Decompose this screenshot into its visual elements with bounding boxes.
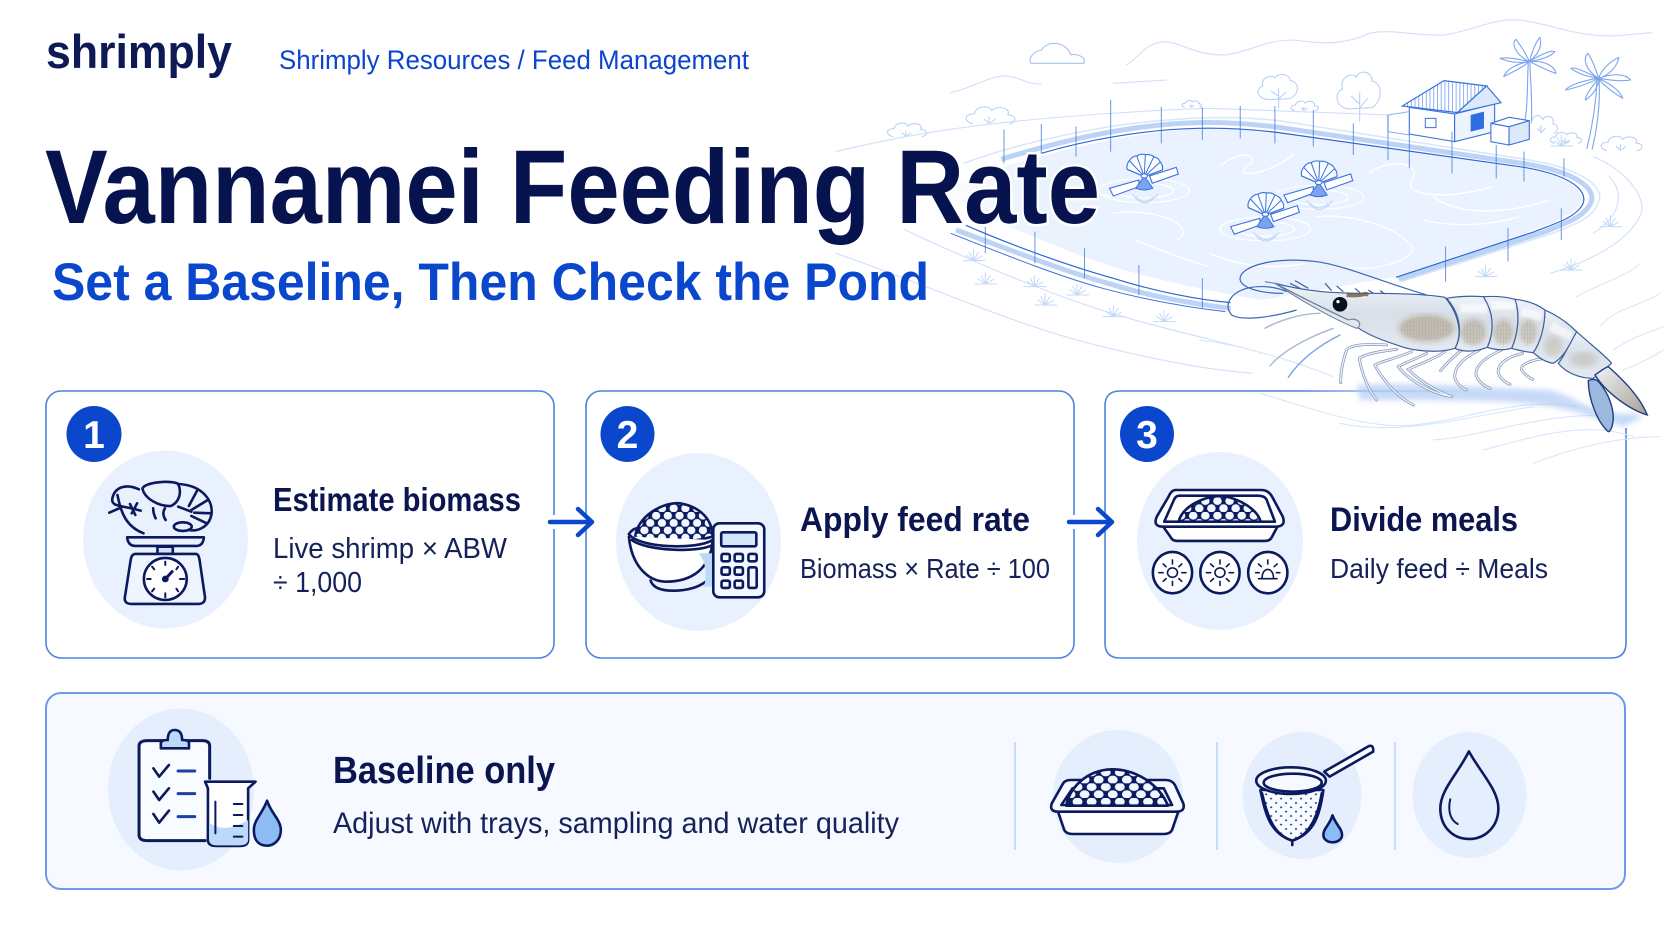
step 1 heading: Estimate biomass [273,481,521,518]
pond water [927,129,1581,300]
step 1 formula: ÷ 1,000 [273,567,362,599]
step 1 formula [273,533,508,599]
panel heading: Baseline only [333,750,555,792]
panel frame [46,693,1625,889]
step number badge: 1 [83,414,105,457]
step 2 heading: Apply feed rate [800,501,1030,539]
step 2 formula: Biomass × Rate ÷ 100 [800,553,1050,584]
panel: step 1 estimate biomass [46,391,554,658]
step number badge: 3 [1136,414,1158,457]
panel: step 2 apply feed rate [586,391,1074,658]
pond banks [951,118,1600,312]
shrimp body [1275,283,1612,378]
rostrum and eye [1265,281,1385,328]
title: Vannamei Feeding Rate [45,129,1100,246]
water lines [1200,263,1663,463]
aerators [1099,154,1364,241]
palm trees [1500,37,1631,149]
step 1 formula: Live shrimp × ABW [273,533,508,565]
shrimp illustration [1200,260,1663,463]
step number badge [66,406,122,462]
hills and clouds [836,20,1652,373]
icon: clipboard, beaker and drop [108,708,281,870]
background scene: pond illustration [836,20,1652,373]
icon: feed tray [1051,730,1184,863]
icon: feed bowl and calculator [616,453,781,631]
farm house [1388,81,1529,145]
panel: baseline only [46,693,1625,889]
subtitle: Set a Baseline, Then Check the Pond [52,253,929,312]
antennae [1240,260,1427,295]
water ripples [1060,153,1551,268]
step 3 heading: Divide meals [1330,501,1518,539]
ground shadow [1357,384,1643,427]
card frame [1105,391,1626,658]
icon: water drop [1412,732,1526,858]
step number badge [600,406,654,462]
fence posts [985,100,1564,308]
logo: shrimply [46,25,232,78]
icon: feed tray and three meal times [1137,452,1303,630]
step number badge: 2 [617,414,638,457]
feelers [1265,313,1340,377]
arrow: step 2 to step 3 [1068,509,1112,535]
icon: sampling net [1242,732,1373,859]
arrow: step 1 to step 2 [549,509,592,535]
tail fan [1588,367,1647,432]
panel: step 3 divide meals [1105,391,1626,658]
step 3 formula: Daily feed ÷ Meals [1330,553,1548,584]
grass tufts [963,135,1622,322]
breadcrumb: Shrimply Resources / Feed Management [279,45,749,75]
walking legs and swimmerets [1341,344,1545,405]
icon: shrimp on scale [83,450,248,628]
step number badge [1120,406,1174,462]
card frame [46,391,554,658]
trees and bushes [888,72,1642,151]
shell mottling [1347,294,1597,367]
card frame [586,391,1074,658]
panel note: Adjust with trays, sampling and water quality [333,807,899,840]
